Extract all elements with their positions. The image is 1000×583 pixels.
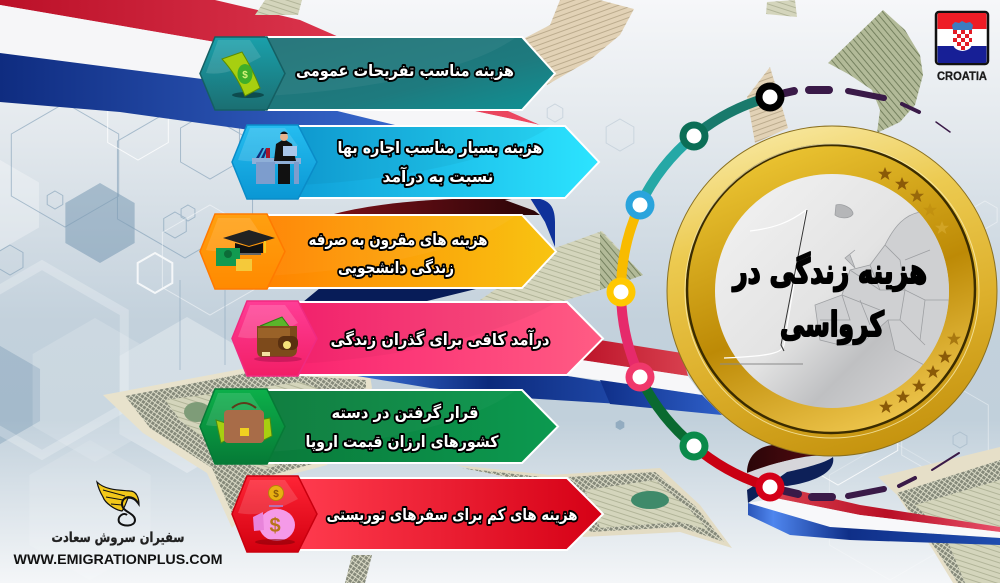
ribbon: middle curl behind banners: [303, 198, 722, 415]
panel: student living: زندگی دانشجویی: [338, 258, 454, 277]
icon: piggy bank: [232, 476, 317, 552]
heading: کرواسی: [780, 305, 884, 345]
panel: student living: هزینه های مقرون به صرفه: [308, 230, 488, 249]
panel: low tourism costs: [232, 476, 603, 552]
icon: croatia flag: [936, 12, 988, 64]
panel: cheap european countries: قرار گرفتن در دسته: [332, 403, 478, 422]
panel: affordable rent: [232, 125, 599, 199]
heading: [732, 252, 927, 345]
timeline arc with nodes: [606, 82, 959, 502]
icon: wallet: [232, 301, 317, 376]
panel: student living: [200, 214, 556, 289]
icon: briefcase with money: [200, 389, 285, 464]
icon: office desk: [232, 125, 317, 199]
heading: هزینه زندگی در: [732, 252, 927, 292]
icon: banknote: $: [242, 70, 248, 81]
panel: affordable rent: نسبت به درآمد: [382, 166, 494, 186]
logo: WWW.EMIGRATIONPLUS.COM: [14, 551, 223, 567]
coin: stars: [878, 167, 961, 413]
ribbon: bottom curl: [747, 445, 1000, 545]
panel: sufficient income: [232, 301, 603, 376]
logo: سفیران سروش سعادت: [52, 530, 184, 546]
coin: europe map: [815, 205, 950, 368]
flag caption: CROATIA: [937, 69, 987, 83]
icon: piggy bank: $: [273, 489, 279, 500]
coin: numeral one: [720, 210, 807, 364]
panel: sufficient income: درآمد کافی برای گذران زندگی: [330, 329, 550, 349]
icon: piggy bank: $: [269, 515, 281, 537]
panel: cheap european countries: [200, 389, 558, 464]
logo: [14, 482, 223, 567]
panel: public entertainment: [200, 37, 555, 110]
icon: graduation cap and cash: [200, 214, 285, 289]
panel: affordable rent: هزینه بسیار مناسب اجاره بها: [338, 138, 542, 157]
panel: low tourism costs: هزینه های کم برای سفرهای توریستی: [326, 505, 578, 524]
ribbon: top flag stripes: [0, 0, 540, 150]
panel: public entertainment: هزینه مناسب تفریحات عمومی: [296, 61, 514, 80]
icon: winged emblem: [97, 482, 139, 526]
panel: cheap european countries: کشورهای ارزان قیمت اروپا: [306, 432, 499, 452]
icon: banknote: [200, 37, 285, 110]
coin: euro with title: [667, 126, 997, 456]
